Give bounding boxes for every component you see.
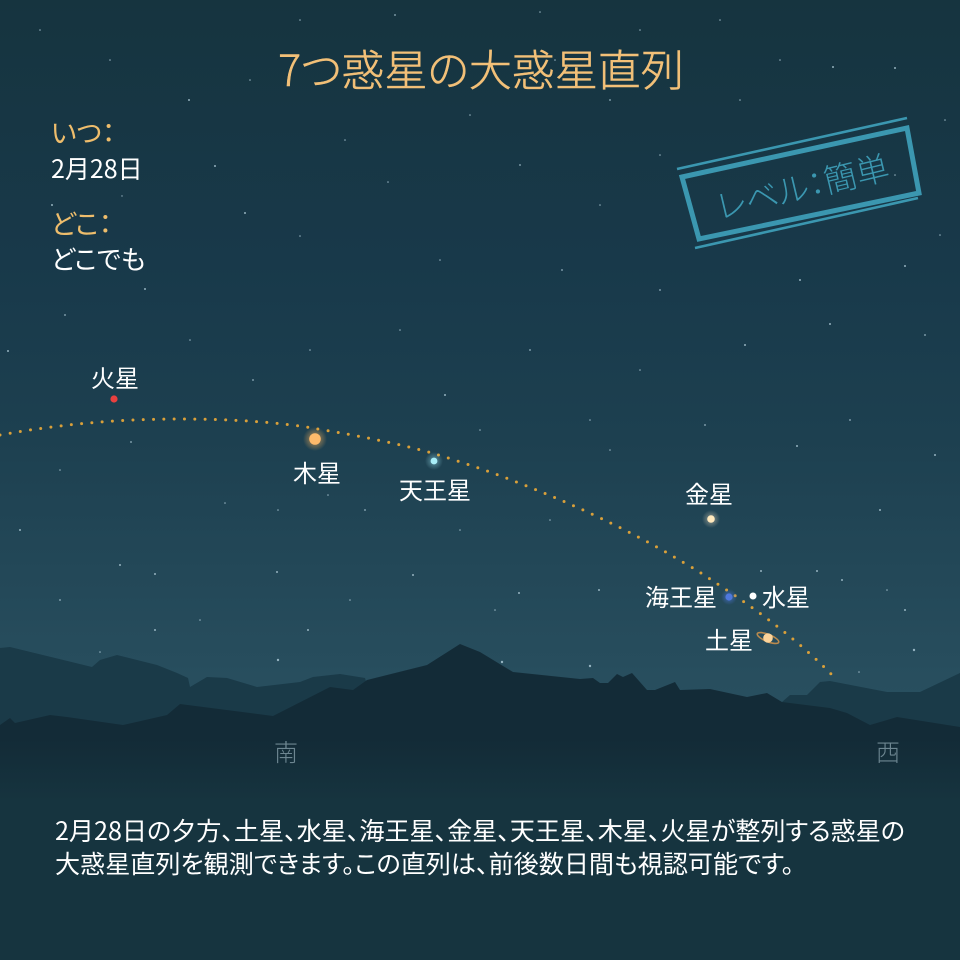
description text: 大惑星直列を観測できます。この直列は、前後数日間も視認可能です。 [55, 845, 794, 881]
ecliptic dotted line [0, 419, 832, 675]
when value: 2月28日 [51, 150, 143, 186]
mountains: front range [0, 644, 960, 960]
where value: どこでも [51, 240, 145, 277]
planet: Saturn [705, 621, 780, 656]
planet: Jupiter [293, 427, 341, 489]
mountains: back range [0, 647, 960, 740]
planet: Uranus [399, 452, 471, 506]
planet: Uranus: 天王星 [399, 471, 471, 506]
planet: Mercury: 水星 [762, 578, 810, 613]
planet: Saturn: 土星 [705, 621, 753, 656]
description text: 2月28日の夕方、土星、水星、海王星、金星、天王星、木星、火星が整列する惑星の [55, 812, 905, 848]
night sky background [0, 0, 960, 730]
stamp: difficulty level: レベル：簡単 [711, 141, 894, 229]
description text [55, 812, 905, 881]
planet: Neptune: 海王星 [645, 578, 717, 613]
when heading: いつ： [51, 112, 115, 151]
stamp: difficulty level [677, 118, 919, 248]
planet: Mars: 火星 [91, 359, 139, 394]
direction label: south: 南 [274, 733, 298, 768]
stars [7, 11, 946, 673]
planet: Venus [685, 475, 733, 528]
planet: Venus: 金星 [685, 475, 733, 510]
direction label: west: 西 [876, 733, 900, 768]
planet: Jupiter: 木星 [293, 454, 341, 489]
where heading: どこ： [51, 203, 112, 242]
title: 7つ惑星の大惑星直列 [278, 37, 684, 99]
